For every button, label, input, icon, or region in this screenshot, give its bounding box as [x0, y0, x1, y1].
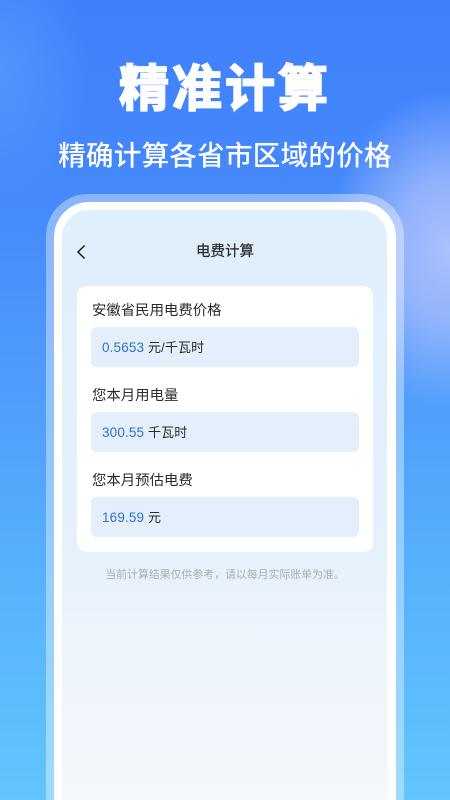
label: estimated fee: 您本月预估电费	[92, 473, 193, 489]
subtitle: 精确计算各省市区域的价格	[58, 140, 392, 171]
icon: back arrow	[77, 245, 85, 259]
label: monthly usage: 您本月用电量	[92, 388, 178, 404]
field: monthly usage: 300.55 千瓦时	[102, 425, 187, 440]
phone white bezel	[54, 202, 396, 800]
panel: calculation card	[77, 286, 373, 552]
field: monthly usage	[91, 412, 359, 452]
field: estimated fee	[91, 497, 359, 537]
title: 精准计算	[119, 61, 331, 117]
field: estimated fee: 169.59 元	[102, 510, 161, 525]
screen heading: 电费计算	[196, 244, 254, 260]
field: electricity price: 0.5653 元/千瓦时	[102, 340, 204, 355]
phone mockup	[46, 194, 404, 800]
field: electricity price	[91, 327, 359, 367]
phone screen	[62, 210, 387, 800]
label: electricity price: 安徽省民用电费价格	[92, 303, 222, 319]
disclaimer note: 当前计算结果仅供参考，请以每月实际账单为准。	[105, 569, 345, 581]
